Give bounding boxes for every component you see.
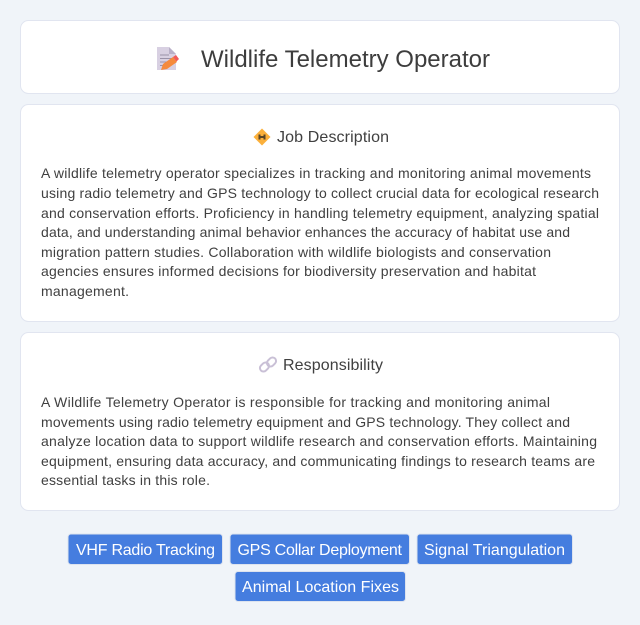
title: Wildlife Telemetry Operator: [201, 46, 490, 73]
heading: responsibility: Responsibility: [283, 357, 383, 374]
text block: responsibility: A Wildlife Telemetry Operator is responsible for tracking and monitoring animal: [41, 394, 550, 410]
tag: VHF Radio Tracking: [68, 534, 222, 564]
icon: memo with pencil: [157, 47, 179, 70]
tag: GPS Collar Deployment: GPS Collar Deployment: [238, 542, 403, 559]
text block: job description: and conservation efforts. Proficiency in handling telemetry equipment, analyzing spatial: [41, 205, 599, 221]
tag: Signal Triangulation: Signal Triangulation: [424, 542, 565, 559]
tag: Animal Location Fixes: Animal Location Fixes: [242, 579, 399, 596]
panel: responsibility: [20, 332, 620, 510]
text block: responsibility: essential tasks in this role.: [41, 472, 210, 488]
tag: Animal Location Fixes: [235, 572, 406, 602]
panel: title card: [20, 20, 620, 94]
text block: job description: [41, 165, 599, 299]
panel: job description: [20, 104, 620, 322]
text block: responsibility: equipment, ensuring data accuracy, and communicating findings to research teams are: [41, 453, 595, 469]
tag: GPS Collar Deployment: [230, 534, 410, 564]
tag: Signal Triangulation: [417, 534, 572, 564]
text block: responsibility: movements using radio telemetry equipment and GPS technology. They collect and: [41, 414, 570, 430]
icon: orange diamond: [254, 128, 270, 146]
text block: job description: data, and understanding animal behavior enhances the accuracy of habitat use and: [41, 224, 570, 240]
tag: VHF Radio Tracking: VHF Radio Tracking: [76, 542, 215, 559]
text block: responsibility: [41, 394, 597, 488]
text block: job description: agencies ensures informed decisions for biodiversity preservation and habitat: [41, 263, 536, 279]
icon: chain link: [258, 356, 278, 373]
heading: job description: Job Description: [277, 129, 389, 146]
text block: job description: A wildlife telemetry operator specializes in tracking and monitoring animal movements: [41, 165, 591, 181]
text block: job description: management.: [41, 283, 129, 299]
text block: job description: using radio telemetry and GPS technology to collect crucial data for ecological research: [41, 185, 599, 201]
text block: responsibility: analyze location data to support wildlife research and conservation efforts. Maintaining: [41, 433, 597, 449]
text block: job description: migration pattern studies. Collaboration with wildlife biologists and conservation: [41, 244, 551, 260]
